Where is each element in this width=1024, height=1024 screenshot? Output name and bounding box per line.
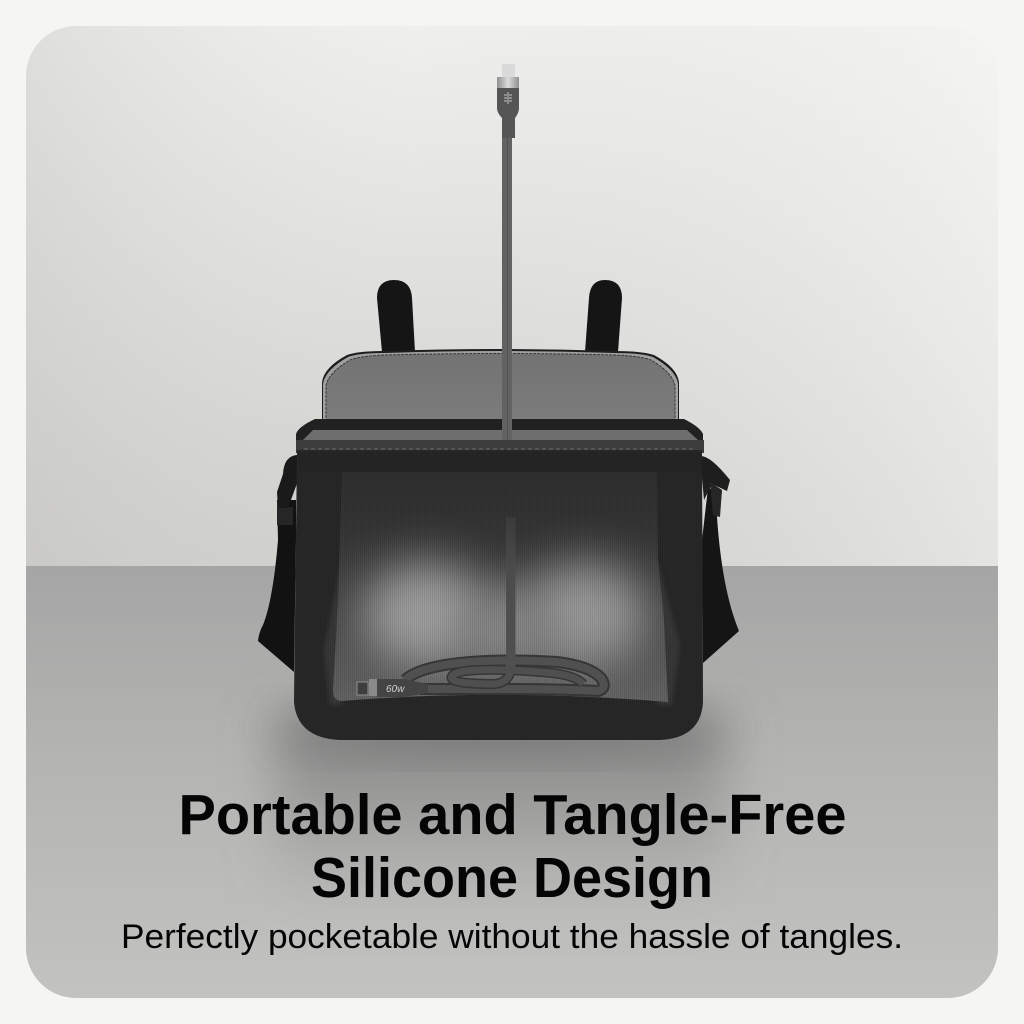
glow centre (455, 588, 555, 672)
outer loop (405, 660, 604, 691)
cable vertical section through bag (506, 517, 516, 667)
stitching (304, 448, 696, 450)
transparent window showing cable (333, 481, 668, 702)
title (178, 783, 846, 910)
side flares of window area (324, 560, 680, 705)
right strap (700, 456, 739, 663)
left closure tab (377, 280, 415, 352)
cable above bag (502, 132, 512, 440)
icon: shoulder bag with cable inside (258, 64, 739, 740)
brand mark (504, 92, 512, 104)
title: Portable and Tangle-Free (178, 783, 846, 847)
bag rim opening (296, 419, 704, 453)
top band of bag (298, 453, 702, 472)
right closure tab (585, 280, 622, 352)
title: Silicone Design (311, 846, 713, 910)
open lid (322, 349, 679, 422)
cable connector top (497, 64, 519, 138)
USB-C connector with 60W label (357, 679, 428, 697)
coiled cable (405, 660, 604, 691)
inner loop (452, 666, 583, 684)
subtitle: Perfectly pocketable without the hassle of tangles. (121, 918, 903, 956)
left strap (258, 455, 299, 672)
glow left (363, 563, 487, 667)
fabric texture (294, 450, 703, 740)
USB-C connector with 60W label: 60w (386, 684, 405, 695)
bag body (294, 450, 703, 740)
glow right (523, 563, 647, 667)
